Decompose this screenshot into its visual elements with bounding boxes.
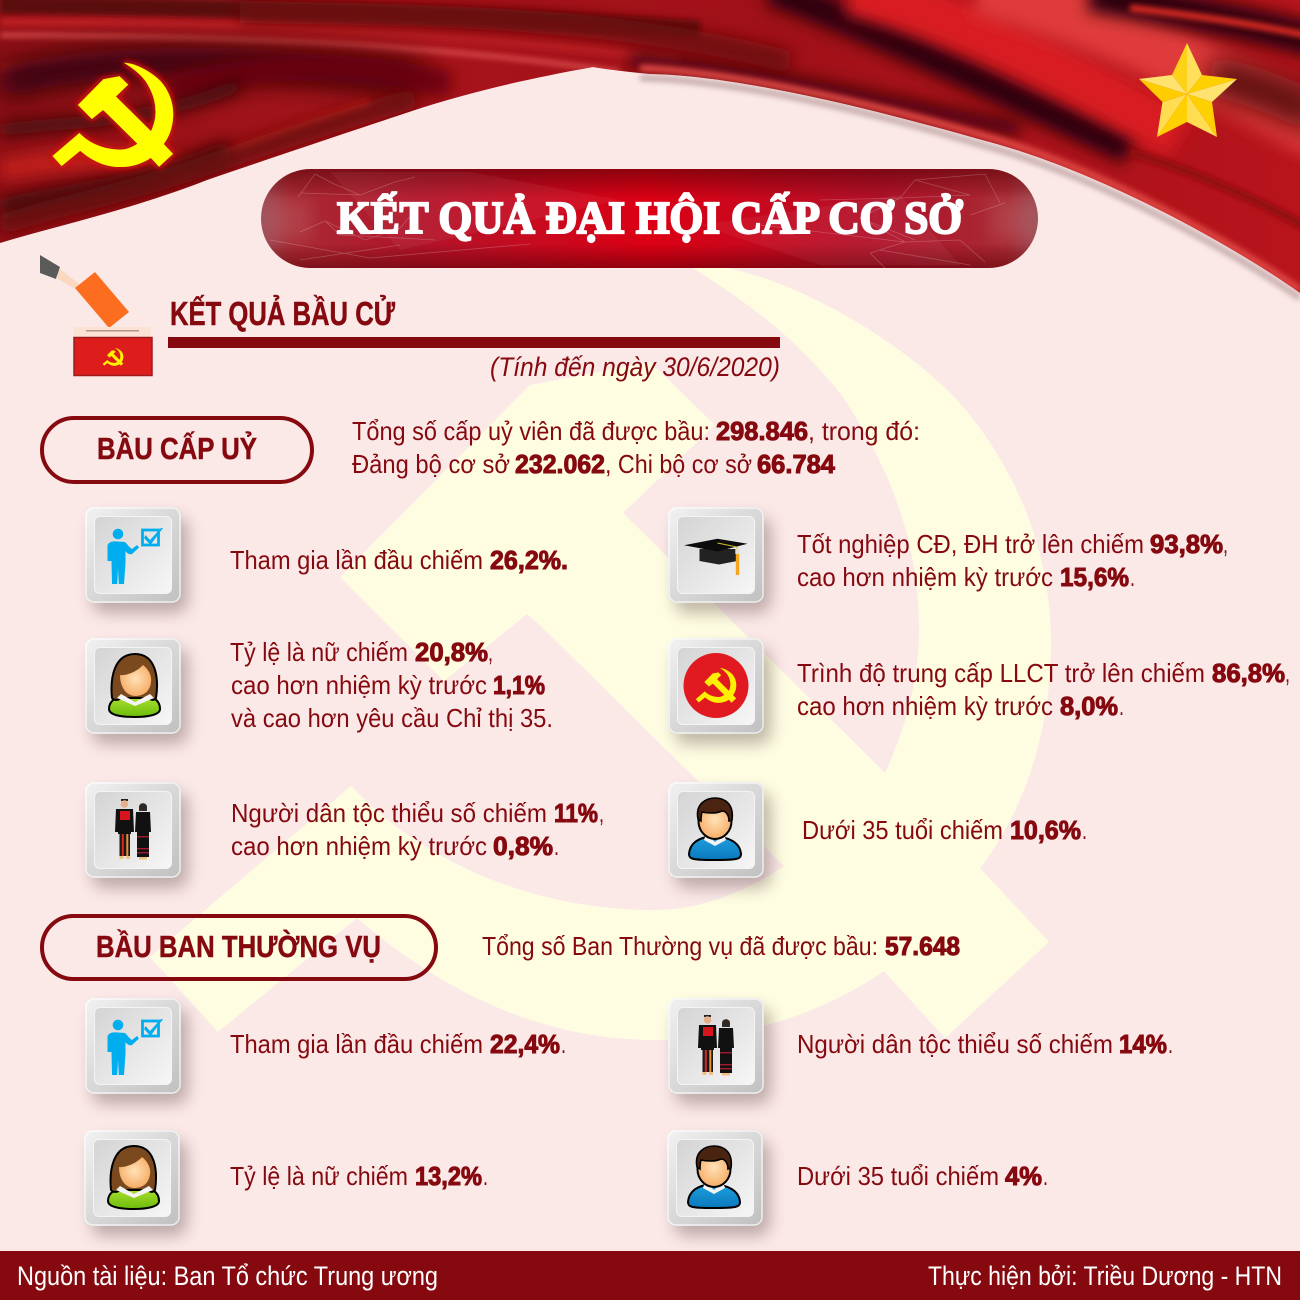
stat: political theory 86.8%: 86,8% bbox=[1212, 658, 1285, 688]
stat: college degree 93.8%: cao hơn nhiệm kỳ trước bbox=[797, 562, 1053, 592]
stat: college degree 93.8%: Tốt nghiệp CĐ, ĐH trở lên chiếm bbox=[797, 529, 1144, 559]
icon: party hammer and sickle emblem bbox=[52, 63, 173, 167]
stat: political theory 86.8% bbox=[797, 658, 1290, 721]
stat: women 13.2%: . bbox=[483, 1161, 488, 1191]
text block: committee totals bbox=[352, 416, 920, 479]
text block: committee totals: , trong đó: bbox=[808, 416, 920, 446]
stat: ethnic minorities 14%: . bbox=[1168, 1029, 1173, 1059]
stat: women 20.8% bbox=[230, 637, 553, 733]
stat: ethnic minorities 11%: 11% bbox=[554, 798, 598, 828]
icon: woman bbox=[84, 1130, 187, 1236]
section heading: election results bbox=[168, 295, 780, 382]
stat: ethnic minorities 11%: cao hơn nhiệm kỳ trước bbox=[231, 831, 487, 861]
stat: women 13.2%: 13,2% bbox=[415, 1161, 482, 1191]
stat: political theory 86.8%: cao hơn nhiệm kỳ trước bbox=[797, 691, 1053, 721]
pill heading: standing committee election bbox=[42, 916, 436, 979]
header ribbon bbox=[0, 0, 1300, 300]
stat: under 35 10.6%: . bbox=[1082, 815, 1087, 845]
stat: women 13.2%: Tỷ lệ là nữ chiếm bbox=[230, 1161, 408, 1191]
stat: women 20.8%: Tỷ lệ là nữ chiếm bbox=[230, 637, 408, 667]
stat: political theory 86.8%: 8,0% bbox=[1060, 691, 1118, 721]
text block: committee totals: 66.784 bbox=[757, 449, 836, 479]
stat: women 20.8%: và cao hơn yêu cầu Chỉ thị 35. bbox=[231, 703, 553, 733]
text block: committee totals: 298.846 bbox=[716, 416, 808, 446]
icon: party emblem badge bbox=[668, 638, 771, 744]
stat: college degree 93.8%: 15,6% bbox=[1060, 562, 1129, 592]
stat: ethnic minorities 11%: . bbox=[554, 831, 559, 861]
footer bar: Nguồn tài liệu: Ban Tổ chức Trung ương bbox=[17, 1261, 438, 1291]
stat: women 20.8%: cao hơn nhiệm kỳ trước bbox=[231, 670, 487, 700]
stat: ethnic minorities 11%: Người dân tộc thiểu số chiếm bbox=[231, 798, 547, 828]
watermark: hammer and sickle bbox=[150, 262, 1051, 1040]
text block: committee totals: , Chi bộ cơ sở bbox=[605, 449, 752, 479]
icon: gold star bbox=[1139, 43, 1237, 137]
text block: committee totals: Tổng số cấp uỷ viên đã được bầu: bbox=[352, 416, 710, 446]
stat: ethnic minorities 14%: Người dân tộc thiểu số chiếm bbox=[797, 1029, 1113, 1059]
stat: ethnic minorities 11% bbox=[231, 798, 604, 861]
text block: committee totals: 232.062 bbox=[515, 449, 605, 479]
icon: ethnic minority couple bbox=[668, 998, 771, 1104]
icon: young man bbox=[667, 1130, 770, 1236]
title text: KẾT QUẢ ĐẠI HỘI CẤP CƠ SỞ bbox=[337, 191, 963, 243]
stat: political theory 86.8%: . bbox=[1119, 691, 1124, 721]
stat: ethnic minorities 14%: 14% bbox=[1119, 1029, 1167, 1059]
stat: political theory 86.8%: Trình độ trung cấp LLCT trở lên chiếm bbox=[797, 658, 1205, 688]
stat: women 20.8%: 1,1% bbox=[493, 670, 545, 700]
pill heading: standing committee election: BẦU BAN THƯỜNG VỤ bbox=[96, 928, 381, 964]
stat: women 20.8%: 20,8% bbox=[415, 637, 488, 667]
stat: under 35 4%: 4% bbox=[1005, 1161, 1042, 1191]
section heading: election results: (Tính đến ngày 30/6/2020) bbox=[490, 352, 780, 382]
stat: college degree 93.8% bbox=[797, 529, 1228, 592]
text block: standing committee total: 57.648 bbox=[885, 931, 960, 961]
stat: college degree 93.8%: . bbox=[1130, 562, 1135, 592]
icon: young man bbox=[668, 782, 771, 888]
stat: college degree 93.8%: 93,8% bbox=[1150, 529, 1223, 559]
text block: standing committee total: Tổng số Ban Thường vụ đã được bầu: bbox=[482, 931, 878, 961]
stat: first time 22.4%: . bbox=[561, 1029, 566, 1059]
stat: under 35 4%: . bbox=[1043, 1161, 1048, 1191]
stat: first time 26.2%: 26,2%. bbox=[490, 545, 568, 575]
stat: women 20.8%: , bbox=[488, 637, 493, 667]
icon: ethnic minority couple bbox=[85, 782, 188, 888]
text block: committee totals: Đảng bộ cơ sở bbox=[352, 449, 510, 479]
stat: ethnic minorities 11%: 0,8% bbox=[493, 831, 553, 861]
pill heading: committee election: BẦU CẤP UỶ bbox=[97, 431, 257, 466]
title banner bbox=[261, 169, 1040, 268]
icon: graduation cap bbox=[668, 507, 771, 613]
stat: college degree 93.8%: , bbox=[1223, 529, 1228, 559]
stat: first time 22.4%: 22,4% bbox=[490, 1029, 560, 1059]
stat: under 35 4%: Dưới 35 tuổi chiếm bbox=[797, 1161, 999, 1191]
pill heading: committee election bbox=[42, 418, 312, 482]
stat: first time 22.4%: Tham gia lần đầu chiếm bbox=[230, 1029, 483, 1059]
footer bar bbox=[0, 1251, 1300, 1300]
stat: under 35 10.6%: 10,6% bbox=[1010, 815, 1081, 845]
icon: first time participant bbox=[85, 998, 188, 1104]
icon: first time participant bbox=[85, 507, 188, 613]
stat: first time 26.2%: Tham gia lần đầu chiếm bbox=[230, 545, 483, 575]
icon: ballot box with voting hand bbox=[40, 255, 152, 376]
section heading: election results: KẾT QUẢ BẦU CỬ bbox=[170, 295, 395, 332]
stat: ethnic minorities 11%: , bbox=[599, 798, 604, 828]
icon: woman bbox=[85, 638, 188, 744]
stat: political theory 86.8%: , bbox=[1285, 658, 1290, 688]
stat: under 35 10.6%: Dưới 35 tuổi chiếm bbox=[802, 815, 1003, 845]
